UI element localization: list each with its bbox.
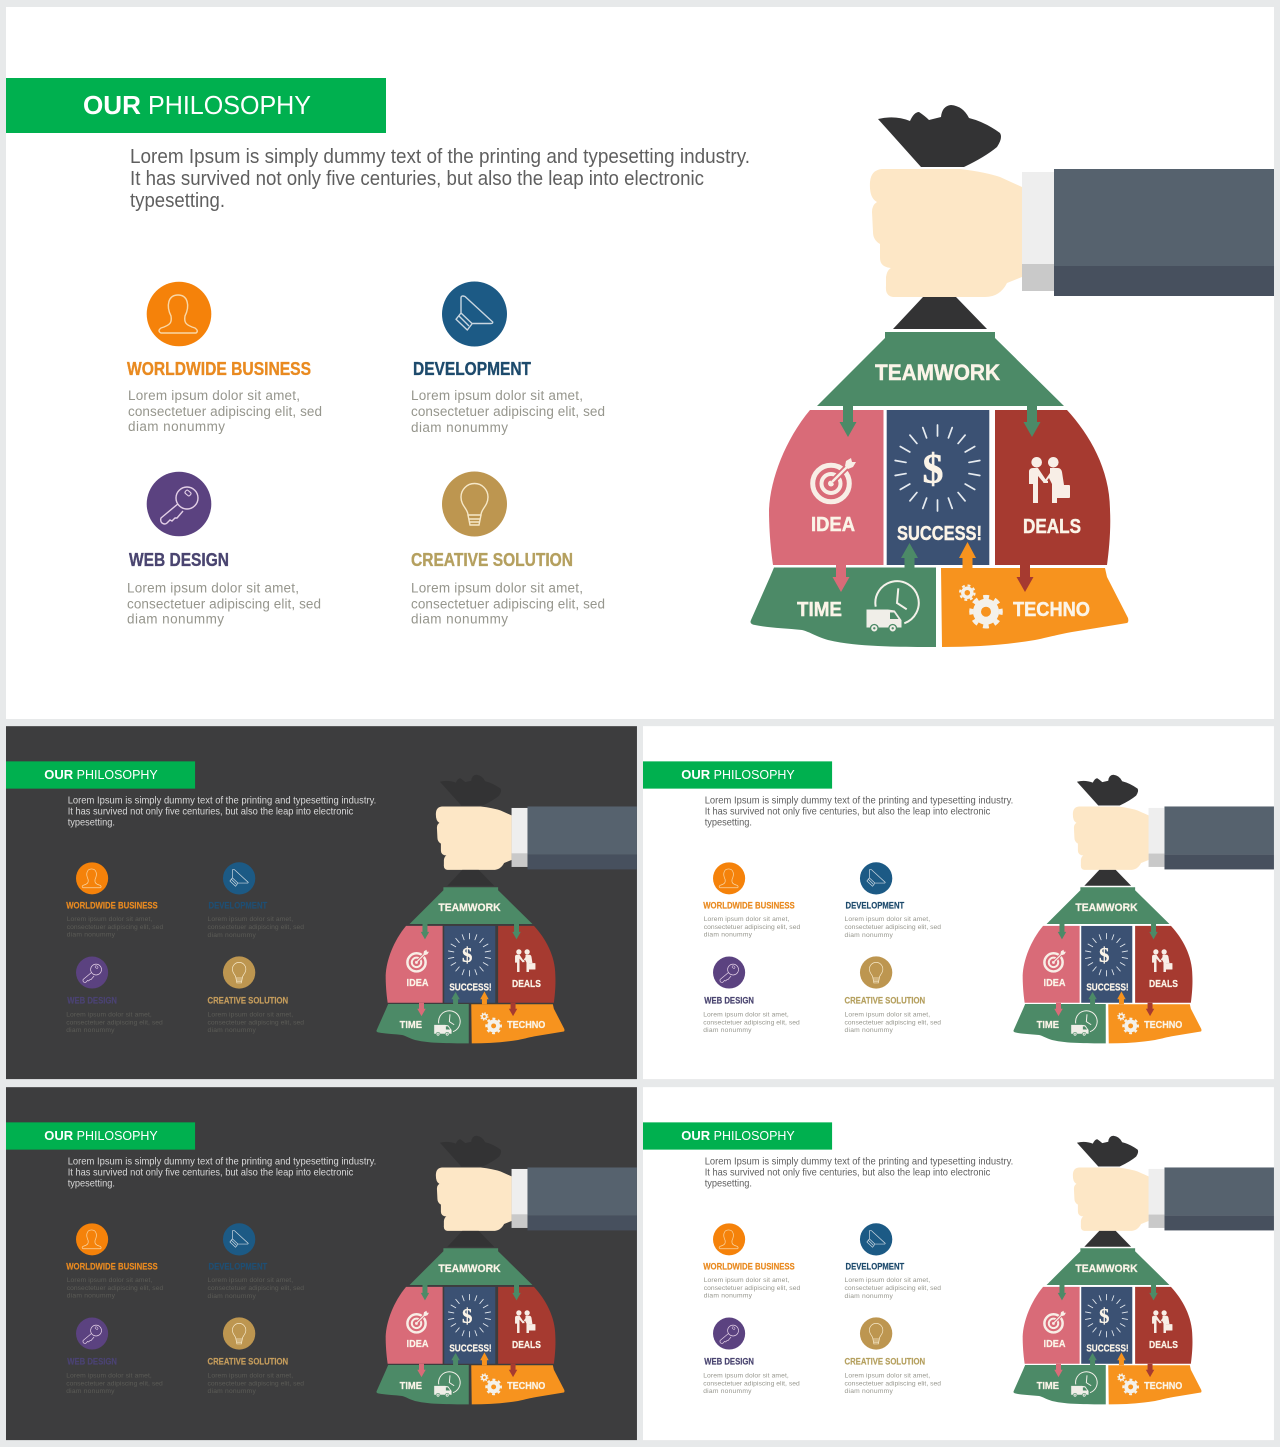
feature: web design: Lorem ipsum dolor sit amet,: [66, 1372, 152, 1379]
title banner: [6, 78, 386, 133]
feature: development: diam nonummy: [411, 420, 508, 435]
feature: worldwide business: diam nonummy: [704, 1292, 753, 1299]
money bag held by hand: TIME: [400, 1020, 422, 1031]
title banner: OUR: [83, 90, 141, 120]
money bag held by hand: TECHNO: [507, 1020, 546, 1031]
money bag held by hand: TIME: [1037, 1381, 1059, 1392]
feature: web design: WEB DESIGN: [67, 1356, 117, 1366]
feature: worldwide business: Lorem ipsum dolor sit amet,: [67, 916, 152, 923]
feature: development: diam nonummy: [208, 932, 256, 939]
money bag held by hand: [1013, 775, 1274, 1043]
title banner: PHILOSOPHY: [148, 90, 311, 120]
intro paragraph: [68, 1157, 376, 1189]
money bag held by hand: $: [1099, 1304, 1109, 1328]
intro paragraph: Lorem Ipsum is simply dummy text of the printing and typesetting industry.: [705, 1157, 1013, 1167]
intro paragraph: [68, 796, 376, 828]
feature: creative solution: diam nonummy: [411, 612, 508, 626]
feature: web design: WEB DESIGN: [704, 1356, 754, 1366]
feature: creative solution: consectetuer adipiscing elit, sed: [411, 596, 605, 612]
feature: creative solution: Lorem ipsum dolor sit amet,: [845, 1011, 930, 1018]
feature: creative solution: consectetuer adipiscing elit, sed: [845, 1019, 941, 1026]
feature: creative solution: [845, 956, 941, 1034]
intro paragraph: typesetting.: [705, 1178, 752, 1189]
intro paragraph: typesetting.: [68, 1178, 115, 1189]
feature: creative solution: [845, 1317, 941, 1395]
money bag held by hand: SUCCESS!: [449, 982, 492, 993]
feature: worldwide business: Lorem ipsum dolor sit amet,: [128, 388, 300, 403]
feature: worldwide business: diam nonummy: [67, 931, 116, 938]
segment: idea: IDEA: [811, 514, 855, 536]
money bag held by hand: TEAMWORK: [1075, 1263, 1138, 1275]
feature: development: Lorem ipsum dolor sit amet,: [845, 1277, 930, 1284]
money bag held by hand: IDEA: [1044, 1339, 1065, 1350]
feature: development: consectetuer adipiscing elit, sed: [845, 924, 941, 931]
panel: white slide top right: [643, 726, 1274, 1079]
money bag held by hand: [750, 105, 1274, 647]
feature: development: [845, 862, 941, 939]
feature: web design: [66, 957, 163, 1034]
intro paragraph: [705, 1157, 1013, 1189]
money bag held by hand: DEALS: [1149, 1340, 1178, 1351]
feature: development: diam nonummy: [845, 932, 893, 939]
title banner: OUR: [681, 1128, 711, 1143]
intro paragraph: typesetting.: [130, 190, 225, 212]
money bag held by hand: TEAMWORK: [438, 902, 501, 914]
segment: techno: [941, 568, 1128, 647]
feature: worldwide business: diam nonummy: [704, 931, 753, 938]
feature: web design: consectetuer adipiscing elit, sed: [703, 1380, 800, 1387]
feature: creative solution: Lorem ipsum dolor sit amet,: [208, 1011, 293, 1018]
feature: worldwide business: consectetuer adipiscing elit, sed: [704, 1285, 801, 1292]
panel: white slide bottom right: [643, 1087, 1274, 1440]
title banner: OUR: [44, 1128, 74, 1143]
title banner: OUR: [44, 767, 74, 782]
feature: development: consectetuer adipiscing elit, sed: [208, 1285, 304, 1292]
feature: worldwide business: diam nonummy: [128, 419, 225, 434]
feature: creative solution: diam nonummy: [208, 1388, 256, 1395]
title banner: PHILOSOPHY: [77, 767, 158, 782]
money bag held by hand: SUCCESS!: [1086, 1343, 1129, 1354]
feature: web design: Lorem ipsum dolor sit amet,: [127, 580, 299, 596]
segment: deals: [995, 410, 1110, 565]
intro paragraph: It has survived not only five centuries, but also the leap into electronic: [705, 806, 990, 817]
feature: web design: [66, 1318, 163, 1395]
segment: time: TIME: [797, 599, 842, 621]
money bag held by hand: TEAMWORK: [438, 1263, 501, 1275]
title banner: PHILOSOPHY: [77, 1128, 158, 1143]
feature: creative solution: consectetuer adipiscing elit, sed: [845, 1380, 941, 1387]
segment: success: SUCCESS!: [897, 523, 982, 545]
money bag held by hand: TIME: [1037, 1020, 1059, 1031]
intro paragraph: Lorem Ipsum is simply dummy text of the printing and typesetting industry.: [705, 796, 1013, 806]
arrows between segments: [832, 406, 1040, 592]
segment: teamwork: [817, 332, 1064, 406]
segment: success: [887, 410, 989, 565]
intro paragraph: It has survived not only five centuries, but also the leap into electronic: [68, 806, 353, 817]
feature: development: DEVELOPMENT: [209, 1262, 268, 1272]
feature: worldwide business: [127, 282, 322, 434]
icon: bag knot: [878, 105, 1001, 167]
money bag held by hand: DEALS: [1149, 979, 1178, 990]
money bag held by hand: SUCCESS!: [1086, 982, 1129, 993]
icon: megaphone: [442, 282, 507, 346]
feature: creative solution: diam nonummy: [845, 1027, 893, 1034]
feature: creative solution: Lorem ipsum dolor sit amet,: [845, 1372, 930, 1379]
money bag held by hand: TECHNO: [1144, 1381, 1183, 1392]
money bag held by hand: IDEA: [1044, 978, 1065, 989]
panel: main white slide: [6, 7, 1274, 719]
feature: web design: Lorem ipsum dolor sit amet,: [703, 1011, 789, 1018]
feature: development: Lorem ipsum dolor sit amet,: [208, 1277, 293, 1284]
intro paragraph: Lorem Ipsum is simply dummy text of the printing and typesetting industry.: [68, 1157, 376, 1167]
feature: web design: diam nonummy: [703, 1388, 752, 1395]
feature: development: Lorem ipsum dolor sit amet,: [411, 388, 583, 403]
feature: web design: diam nonummy: [703, 1027, 752, 1034]
intro paragraph: Lorem Ipsum is simply dummy text of the printing and typesetting industry.: [68, 796, 376, 806]
feature: worldwide business: consectetuer adipiscing elit, sed: [67, 924, 164, 931]
intro paragraph: [705, 796, 1013, 828]
money bag held by hand: [1013, 1136, 1274, 1404]
panel: dark slide bottom left: [6, 1087, 637, 1440]
money bag held by hand: $: [1099, 943, 1109, 967]
money bag held by hand: $: [462, 1304, 472, 1328]
feature: worldwide business: [66, 862, 164, 938]
money bag held by hand: IDEA: [407, 978, 428, 989]
feature: worldwide business: consectetuer adipiscing elit, sed: [128, 404, 322, 419]
segment: teamwork: TEAMWORK: [875, 360, 1000, 385]
feature: development: Lorem ipsum dolor sit amet,: [208, 916, 293, 923]
feature: development: [411, 282, 605, 435]
intro paragraph: [130, 146, 750, 212]
feature: web design: Lorem ipsum dolor sit amet,: [703, 1372, 789, 1379]
feature: creative solution: Lorem ipsum dolor sit amet,: [208, 1372, 293, 1379]
title banner: PHILOSOPHY: [714, 1128, 795, 1143]
intro paragraph: typesetting.: [68, 817, 115, 828]
segment: time: [750, 568, 936, 647]
intro paragraph: It has survived not only five centuries, but also the leap into electronic: [68, 1167, 353, 1178]
feature: worldwide business: WORLDWIDE BUSINESS: [127, 359, 311, 379]
feature: web design: [703, 957, 800, 1034]
feature: web design: consectetuer adipiscing elit, sed: [127, 596, 321, 612]
intro paragraph: Lorem Ipsum is simply dummy text of the printing and typesetting industry.: [130, 146, 750, 168]
feature: worldwide business: WORLDWIDE BUSINESS: [703, 901, 795, 911]
icon: hand and sleeve: [870, 169, 1274, 297]
intro paragraph: typesetting.: [705, 817, 752, 828]
feature: development: DEVELOPMENT: [413, 359, 531, 379]
feature: creative solution: CREATIVE SOLUTION: [208, 995, 288, 1005]
feature: web design: consectetuer adipiscing elit, sed: [703, 1019, 800, 1026]
feature: creative solution: consectetuer adipiscing elit, sed: [208, 1019, 304, 1026]
feature: creative solution: [208, 1317, 304, 1395]
feature: development: Lorem ipsum dolor sit amet,: [845, 916, 930, 923]
intro paragraph: It has survived not only five centuries, but also the leap into electronic: [130, 168, 704, 190]
feature: worldwide business: consectetuer adipiscing elit, sed: [67, 1285, 164, 1292]
feature: creative solution: consectetuer adipiscing elit, sed: [208, 1380, 304, 1387]
feature: worldwide business: WORLDWIDE BUSINESS: [66, 1262, 158, 1272]
money bag held by hand: TECHNO: [1144, 1020, 1183, 1031]
feature: creative solution: diam nonummy: [845, 1388, 893, 1395]
feature: worldwide business: diam nonummy: [67, 1292, 116, 1299]
feature: worldwide business: Lorem ipsum dolor sit amet,: [704, 916, 789, 923]
feature: web design: WEB DESIGN: [704, 995, 754, 1005]
feature: worldwide business: Lorem ipsum dolor sit amet,: [67, 1277, 152, 1284]
feature: worldwide business: [66, 1223, 164, 1299]
feature: creative solution: [208, 956, 304, 1034]
feature: web design: Lorem ipsum dolor sit amet,: [66, 1011, 152, 1018]
title banner: PHILOSOPHY: [714, 767, 795, 782]
feature: creative solution: CREATIVE SOLUTION: [845, 1356, 925, 1366]
feature: creative solution: Lorem ipsum dolor sit amet,: [411, 580, 583, 596]
segment: deals: DEALS: [1023, 516, 1081, 538]
feature: worldwide business: [703, 1223, 801, 1299]
money bag held by hand: SUCCESS!: [449, 1343, 492, 1354]
feature: development: consectetuer adipiscing elit, sed: [411, 404, 605, 419]
feature: worldwide business: WORLDWIDE BUSINESS: [703, 1262, 795, 1272]
feature: creative solution: CREATIVE SOLUTION: [845, 995, 925, 1005]
title banner: [643, 1122, 832, 1150]
feature: web design: diam nonummy: [66, 1388, 115, 1395]
feature: development: diam nonummy: [208, 1293, 256, 1300]
intro paragraph: It has survived not only five centuries, but also the leap into electronic: [705, 1167, 990, 1178]
money bag held by hand: TEAMWORK: [1075, 902, 1138, 914]
money bag held by hand: $: [462, 943, 472, 967]
feature: creative solution: [411, 472, 605, 626]
money bag held by hand: DEALS: [512, 1340, 541, 1351]
icon: person: [147, 282, 211, 346]
feature: creative solution: CREATIVE SOLUTION: [411, 550, 573, 570]
feature: web design: WEB DESIGN: [67, 995, 117, 1005]
feature: web design: [703, 1318, 800, 1395]
money bag held by hand: DEALS: [512, 979, 541, 990]
feature: development: [208, 862, 304, 939]
feature: web design: consectetuer adipiscing elit, sed: [66, 1380, 163, 1387]
feature: development: consectetuer adipiscing elit, sed: [845, 1285, 941, 1292]
feature: web design: consectetuer adipiscing elit, sed: [66, 1019, 163, 1026]
feature: development: DEVELOPMENT: [846, 901, 905, 911]
feature: development: consectetuer adipiscing elit, sed: [208, 924, 304, 931]
feature: development: [845, 1223, 941, 1300]
feature: web design: diam nonummy: [127, 612, 224, 626]
money bag held by hand: TECHNO: [507, 1381, 546, 1392]
icon: key: [147, 472, 211, 536]
feature: worldwide business: consectetuer adipiscing elit, sed: [704, 924, 801, 931]
feature: worldwide business: Lorem ipsum dolor sit amet,: [704, 1277, 789, 1284]
title banner: [643, 761, 832, 789]
feature: development: diam nonummy: [845, 1293, 893, 1300]
feature: worldwide business: WORLDWIDE BUSINESS: [66, 901, 158, 911]
feature: creative solution: diam nonummy: [208, 1027, 256, 1034]
feature: development: DEVELOPMENT: [846, 1262, 905, 1272]
panel: dark slide top left: [6, 726, 637, 1079]
money bag held by hand: [376, 775, 637, 1043]
icon: light bulb: [442, 472, 507, 536]
feature: worldwide business: [703, 862, 801, 938]
title banner: [6, 761, 195, 789]
money bag held by hand: [376, 1136, 637, 1404]
feature: development: [208, 1223, 304, 1300]
title banner: OUR: [681, 767, 711, 782]
title banner: [6, 1122, 195, 1150]
feature: web design: WEB DESIGN: [129, 550, 229, 570]
feature: web design: [127, 472, 321, 626]
feature: web design: diam nonummy: [66, 1027, 115, 1034]
money bag held by hand: IDEA: [407, 1339, 428, 1350]
segment: techno: TECHNO: [1013, 599, 1090, 621]
segment: idea: [769, 410, 884, 565]
money bag held by hand: TIME: [400, 1381, 422, 1392]
segment: success: $: [922, 447, 944, 493]
feature: creative solution: CREATIVE SOLUTION: [208, 1356, 288, 1366]
feature: development: DEVELOPMENT: [209, 901, 268, 911]
icon: bag neck: [893, 297, 987, 329]
